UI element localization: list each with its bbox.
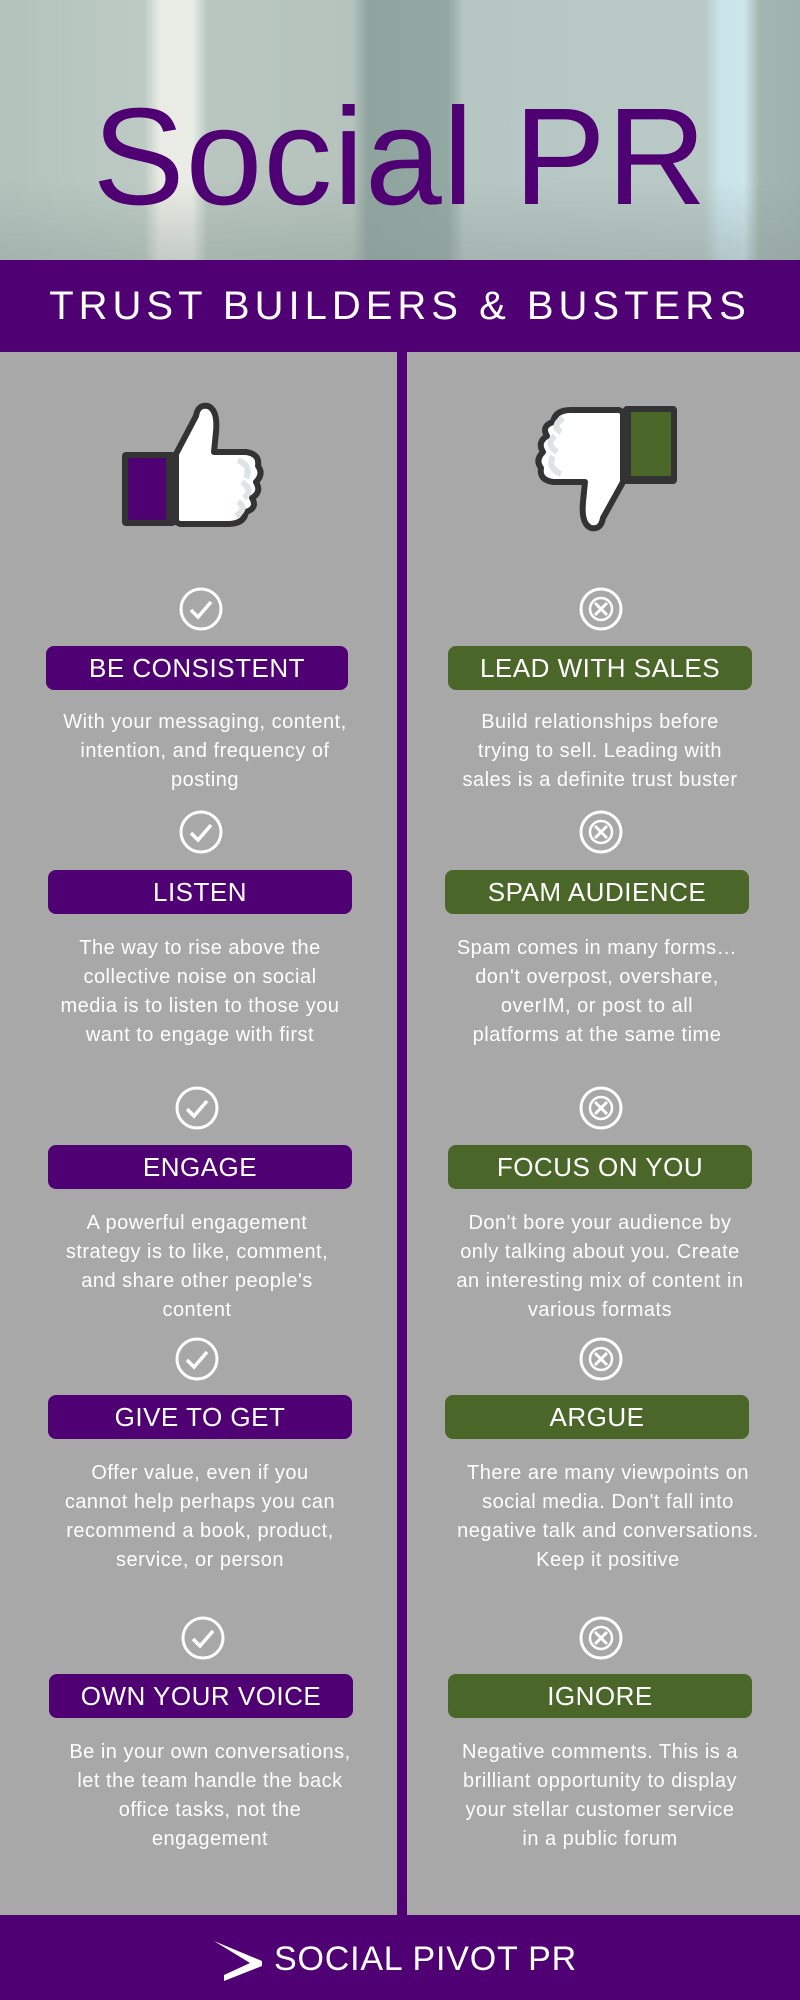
pill heading: ARGUE	[550, 1402, 644, 1432]
pill heading: OWN YOUR VOICE	[81, 1681, 321, 1711]
description	[456, 1212, 744, 1321]
description: let the team handle the back	[77, 1770, 343, 1792]
description: strategy is to like, comment,	[66, 1241, 328, 1263]
description	[462, 711, 738, 791]
description: your stellar customer service	[465, 1799, 735, 1821]
row 5 right: ignore	[448, 1616, 752, 1850]
description: Negative comments. This is a	[462, 1741, 738, 1763]
description: and share other people's	[81, 1270, 313, 1292]
pill heading	[48, 870, 352, 914]
description	[457, 1462, 759, 1571]
icon: check	[176, 1338, 218, 1380]
icon: x	[580, 588, 622, 630]
description: brilliant opportunity to display	[463, 1770, 737, 1792]
pill heading: GIVE TO GET	[115, 1402, 285, 1432]
description: platforms at the same time	[473, 1024, 721, 1046]
description: posting	[171, 769, 239, 791]
description: service, or person	[116, 1549, 284, 1571]
description: Spam comes in many forms…	[457, 937, 737, 959]
pill heading: LISTEN	[153, 877, 247, 907]
description	[60, 937, 339, 1046]
pill heading: SPAM AUDIENCE	[488, 877, 706, 907]
description: media is to listen to those you	[60, 995, 339, 1017]
description	[65, 1462, 335, 1571]
row 3 left: engage	[48, 1086, 352, 1321]
title: Social PR	[93, 80, 707, 234]
description: office tasks, not the	[119, 1799, 301, 1821]
icon: thumbs down	[535, 406, 677, 532]
description: trying to sell. Leading with	[478, 740, 722, 762]
description: various formats	[528, 1299, 672, 1321]
description: Build relationships before	[481, 711, 719, 733]
row 1 left: be consistent	[46, 588, 348, 791]
description	[63, 711, 347, 791]
description: A powerful engagement	[87, 1212, 307, 1234]
description: don't overpost, overshare,	[475, 966, 719, 988]
description: sales is a definite trust buster	[462, 769, 738, 791]
pill heading	[448, 1674, 752, 1718]
description: Offer value, even if you	[91, 1462, 309, 1484]
description: overIM, or post to all	[501, 995, 693, 1017]
description: engagement	[152, 1828, 268, 1850]
description: recommend a book, product,	[66, 1520, 334, 1542]
footer brand text: SOCIAL PIVOT PR	[274, 1940, 577, 1978]
banner: subtitle: TRUST BUILDERS & BUSTERS	[49, 284, 751, 328]
description: negative talk and conversations.	[457, 1520, 759, 1542]
description: With your messaging, content,	[63, 711, 347, 733]
icon: check	[180, 588, 222, 630]
icon: thumbs up	[122, 402, 264, 527]
pill heading: IGNORE	[547, 1681, 653, 1711]
description: an interesting mix of content in	[456, 1270, 744, 1292]
pill heading	[46, 646, 348, 690]
pill heading	[49, 1674, 353, 1718]
description: There are many viewpoints on	[467, 1462, 749, 1484]
banner: subtitle	[0, 260, 800, 352]
description: in a public forum	[522, 1828, 678, 1850]
header image background	[0, 0, 800, 260]
pill heading	[448, 1145, 752, 1189]
footer	[0, 1915, 800, 2000]
description: Be in your own conversations,	[69, 1741, 351, 1763]
description: cannot help perhaps you can	[65, 1491, 335, 1513]
description	[66, 1212, 328, 1321]
pill heading	[445, 1395, 749, 1439]
description: only talking about you. Create	[460, 1241, 740, 1263]
icon: x	[580, 1086, 622, 1130]
description	[462, 1741, 738, 1850]
icon: check	[180, 810, 222, 854]
row 5 left: own your voice	[49, 1616, 353, 1850]
row 1 right: lead with sales	[448, 588, 752, 791]
description: Don't bore your audience by	[468, 1212, 732, 1234]
row 2 left: listen	[48, 810, 352, 1046]
icon: chevron logo	[214, 1941, 262, 1981]
description: The way to rise above the	[79, 937, 321, 959]
row 4 left: give to get	[48, 1338, 352, 1571]
pill heading: LEAD WITH SALES	[480, 653, 720, 683]
column divider	[397, 352, 407, 1932]
pill heading: FOCUS ON YOU	[497, 1152, 703, 1182]
icon: check	[182, 1616, 224, 1660]
pill heading: ENGAGE	[143, 1152, 257, 1182]
description: Keep it positive	[536, 1549, 680, 1571]
pill heading: BE CONSISTENT	[89, 653, 305, 683]
description: intention, and frequency of	[80, 740, 330, 762]
icon: x	[580, 1338, 622, 1380]
icon: x	[580, 810, 622, 854]
description	[457, 937, 737, 1046]
pill heading	[48, 1395, 352, 1439]
pill heading	[48, 1145, 352, 1189]
description	[69, 1741, 351, 1850]
description: want to engage with first	[86, 1024, 314, 1046]
icon: check	[176, 1086, 218, 1130]
pill heading	[445, 870, 749, 914]
row 3 right: focus on you	[448, 1086, 752, 1321]
description: content	[162, 1299, 232, 1321]
row 2 right: spam audience	[445, 810, 749, 1046]
pill heading	[448, 646, 752, 690]
description: collective noise on social	[83, 966, 317, 988]
icon: x	[580, 1616, 622, 1660]
description: social media. Don't fall into	[482, 1491, 734, 1513]
row 4 right: argue	[445, 1338, 759, 1571]
